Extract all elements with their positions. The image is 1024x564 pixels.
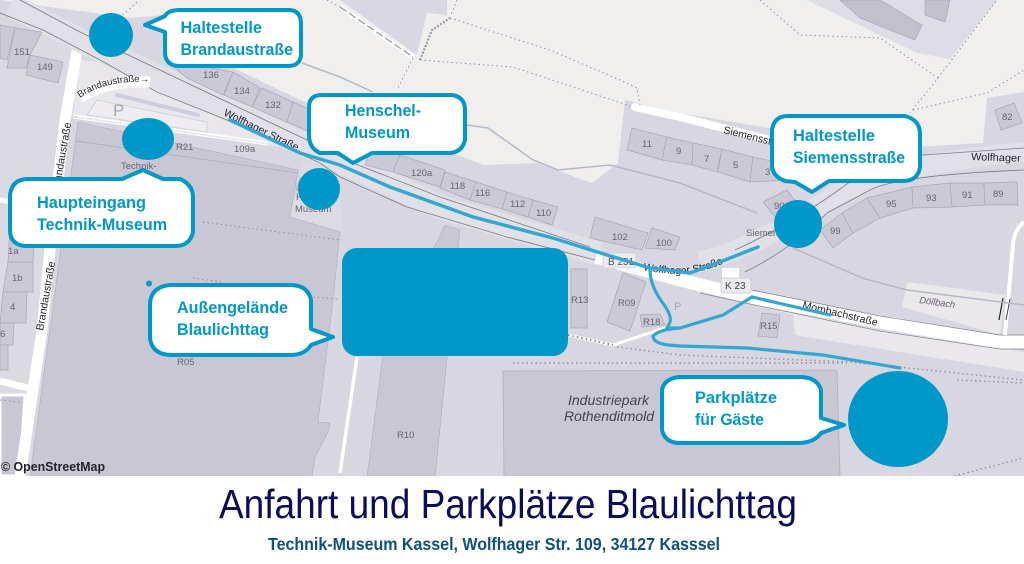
map labels: R13 [571, 295, 588, 306]
callout: Haupteingang Technik-Museum: Technik-Museum [37, 215, 167, 234]
map buildings [0, 0, 1022, 370]
cyan route: main road [230, 120, 758, 273]
map labels: 118 [450, 181, 465, 192]
map labels: 6 [0, 329, 5, 340]
road shield: B 251: B 251 [608, 257, 635, 268]
map labels: 100 [656, 238, 672, 249]
callout: Haltestelle Brandaustraße: Brandaustraße [180, 40, 293, 59]
map labels: 99 [830, 226, 841, 237]
callout: Außengelände Blaulichttag [150, 285, 333, 355]
title: Anfahrt und Parkplätze Blaulichttag [219, 481, 797, 527]
callout: Haltestelle Brandaustraße [145, 10, 301, 66]
map labels: Döllbach [919, 295, 956, 311]
map labels: Siemensstraße [722, 124, 793, 153]
map labels: 11 [642, 139, 652, 150]
callout: Parkplätze für Gäste: Parkplätze [695, 388, 777, 407]
callout: Parkplätze für Gäste: für Gäste [695, 410, 764, 429]
map labels: R21 [176, 142, 193, 153]
marker: main entrance [122, 118, 174, 160]
map labels: P [674, 301, 681, 313]
callout: Parkplätze für Gäste [662, 377, 844, 443]
map labels: R15 [760, 321, 777, 332]
map labels: P [113, 101, 124, 120]
callout: Haltestelle Siemensstraße [772, 116, 920, 192]
map labels: 5 [733, 160, 738, 171]
map labels: 7 [704, 154, 709, 165]
map labels: 136 [203, 70, 219, 81]
marker: Siemensstraße stop [774, 200, 822, 248]
map labels: 109a [234, 144, 256, 155]
map labels: 1b [12, 273, 23, 284]
callout: Haltestelle Siemensstraße: Haltestelle [793, 126, 875, 145]
map labels: 134 [234, 86, 250, 97]
map labels: Technik- [121, 161, 156, 172]
map labels: 91 [962, 190, 973, 201]
attribution: © OpenStreetMap [1, 460, 105, 474]
marker: outdoor area [342, 248, 568, 356]
map labels: Wolfhager Straße [644, 259, 722, 276]
footer background [0, 476, 1024, 564]
map labels: R18 [643, 317, 660, 328]
map labels [0, 47, 1024, 441]
callout: Haltestelle Brandaustraße: Haltestelle [180, 18, 262, 37]
map labels: 90 [774, 201, 785, 212]
map labels: R05 [177, 357, 194, 368]
map labels: Wolfhager Straße [222, 107, 301, 154]
callout: Haltestelle Siemensstraße: Siemensstraße [793, 148, 905, 167]
map labels: Museum [295, 204, 332, 215]
map labels: 1a [8, 246, 19, 257]
map labels: 149 [37, 62, 53, 73]
map labels: 3 [765, 167, 770, 178]
map labels: 89 [993, 189, 1004, 200]
map labels: 102 [612, 232, 628, 243]
map labels: R10 [397, 430, 414, 441]
map labels: R09 [618, 298, 635, 309]
marker: Brandaustraße stop [89, 13, 133, 57]
marker: guest parking [848, 371, 948, 467]
map labels: Siemensstraße [746, 228, 810, 239]
road shield: B 251 [603, 253, 636, 268]
map labels: 112 [510, 199, 525, 210]
map labels: 116 [475, 188, 490, 199]
map labels: 82 [1002, 112, 1013, 123]
callout: Henschel-Museum: Museum [345, 123, 410, 142]
thick path [420, 18, 450, 60]
map labels: Mombachstraße [801, 299, 879, 329]
callout: Henschel-Museum: Henschel- [345, 101, 421, 120]
map labels: 132 [265, 100, 281, 111]
map labels: 95 [886, 199, 897, 210]
map labels: 110 [536, 208, 551, 219]
callout: Haupteingang Technik-Museum [10, 170, 193, 246]
road shield: K 23: K 23 [725, 281, 746, 292]
marker: Henschel museum [298, 168, 340, 210]
map labels: Rothenditmold [564, 408, 655, 424]
map labels: Brandaustraße→ [77, 75, 148, 98]
callout: Außengelände Blaulichttag: Blaulichttag [177, 320, 269, 339]
map labels: 120a [411, 168, 433, 179]
marker: small dot [146, 280, 152, 286]
map labels: Industriepark [568, 392, 650, 408]
map labels: 4 [10, 302, 15, 313]
map labels: H [296, 192, 303, 203]
callout: Außengelände Blaulichttag: Außengelände [177, 298, 288, 317]
subtitle: Technik-Museum Kassel, Wolfhager Str. 109, 34127 Kasssel [268, 534, 720, 554]
road shield: K 23 [721, 278, 751, 293]
map labels: Brandaustraße [50, 121, 74, 193]
map labels: 9 [676, 146, 681, 157]
map labels: 151 [14, 47, 30, 58]
cyan route: to parking [650, 270, 900, 368]
callout: Haupteingang Technik-Museum: Haupteingang [37, 193, 146, 212]
map labels: Brandaustraße [34, 260, 58, 332]
callout: Henschel-Museum [309, 95, 465, 163]
map labels: 93 [926, 193, 937, 204]
